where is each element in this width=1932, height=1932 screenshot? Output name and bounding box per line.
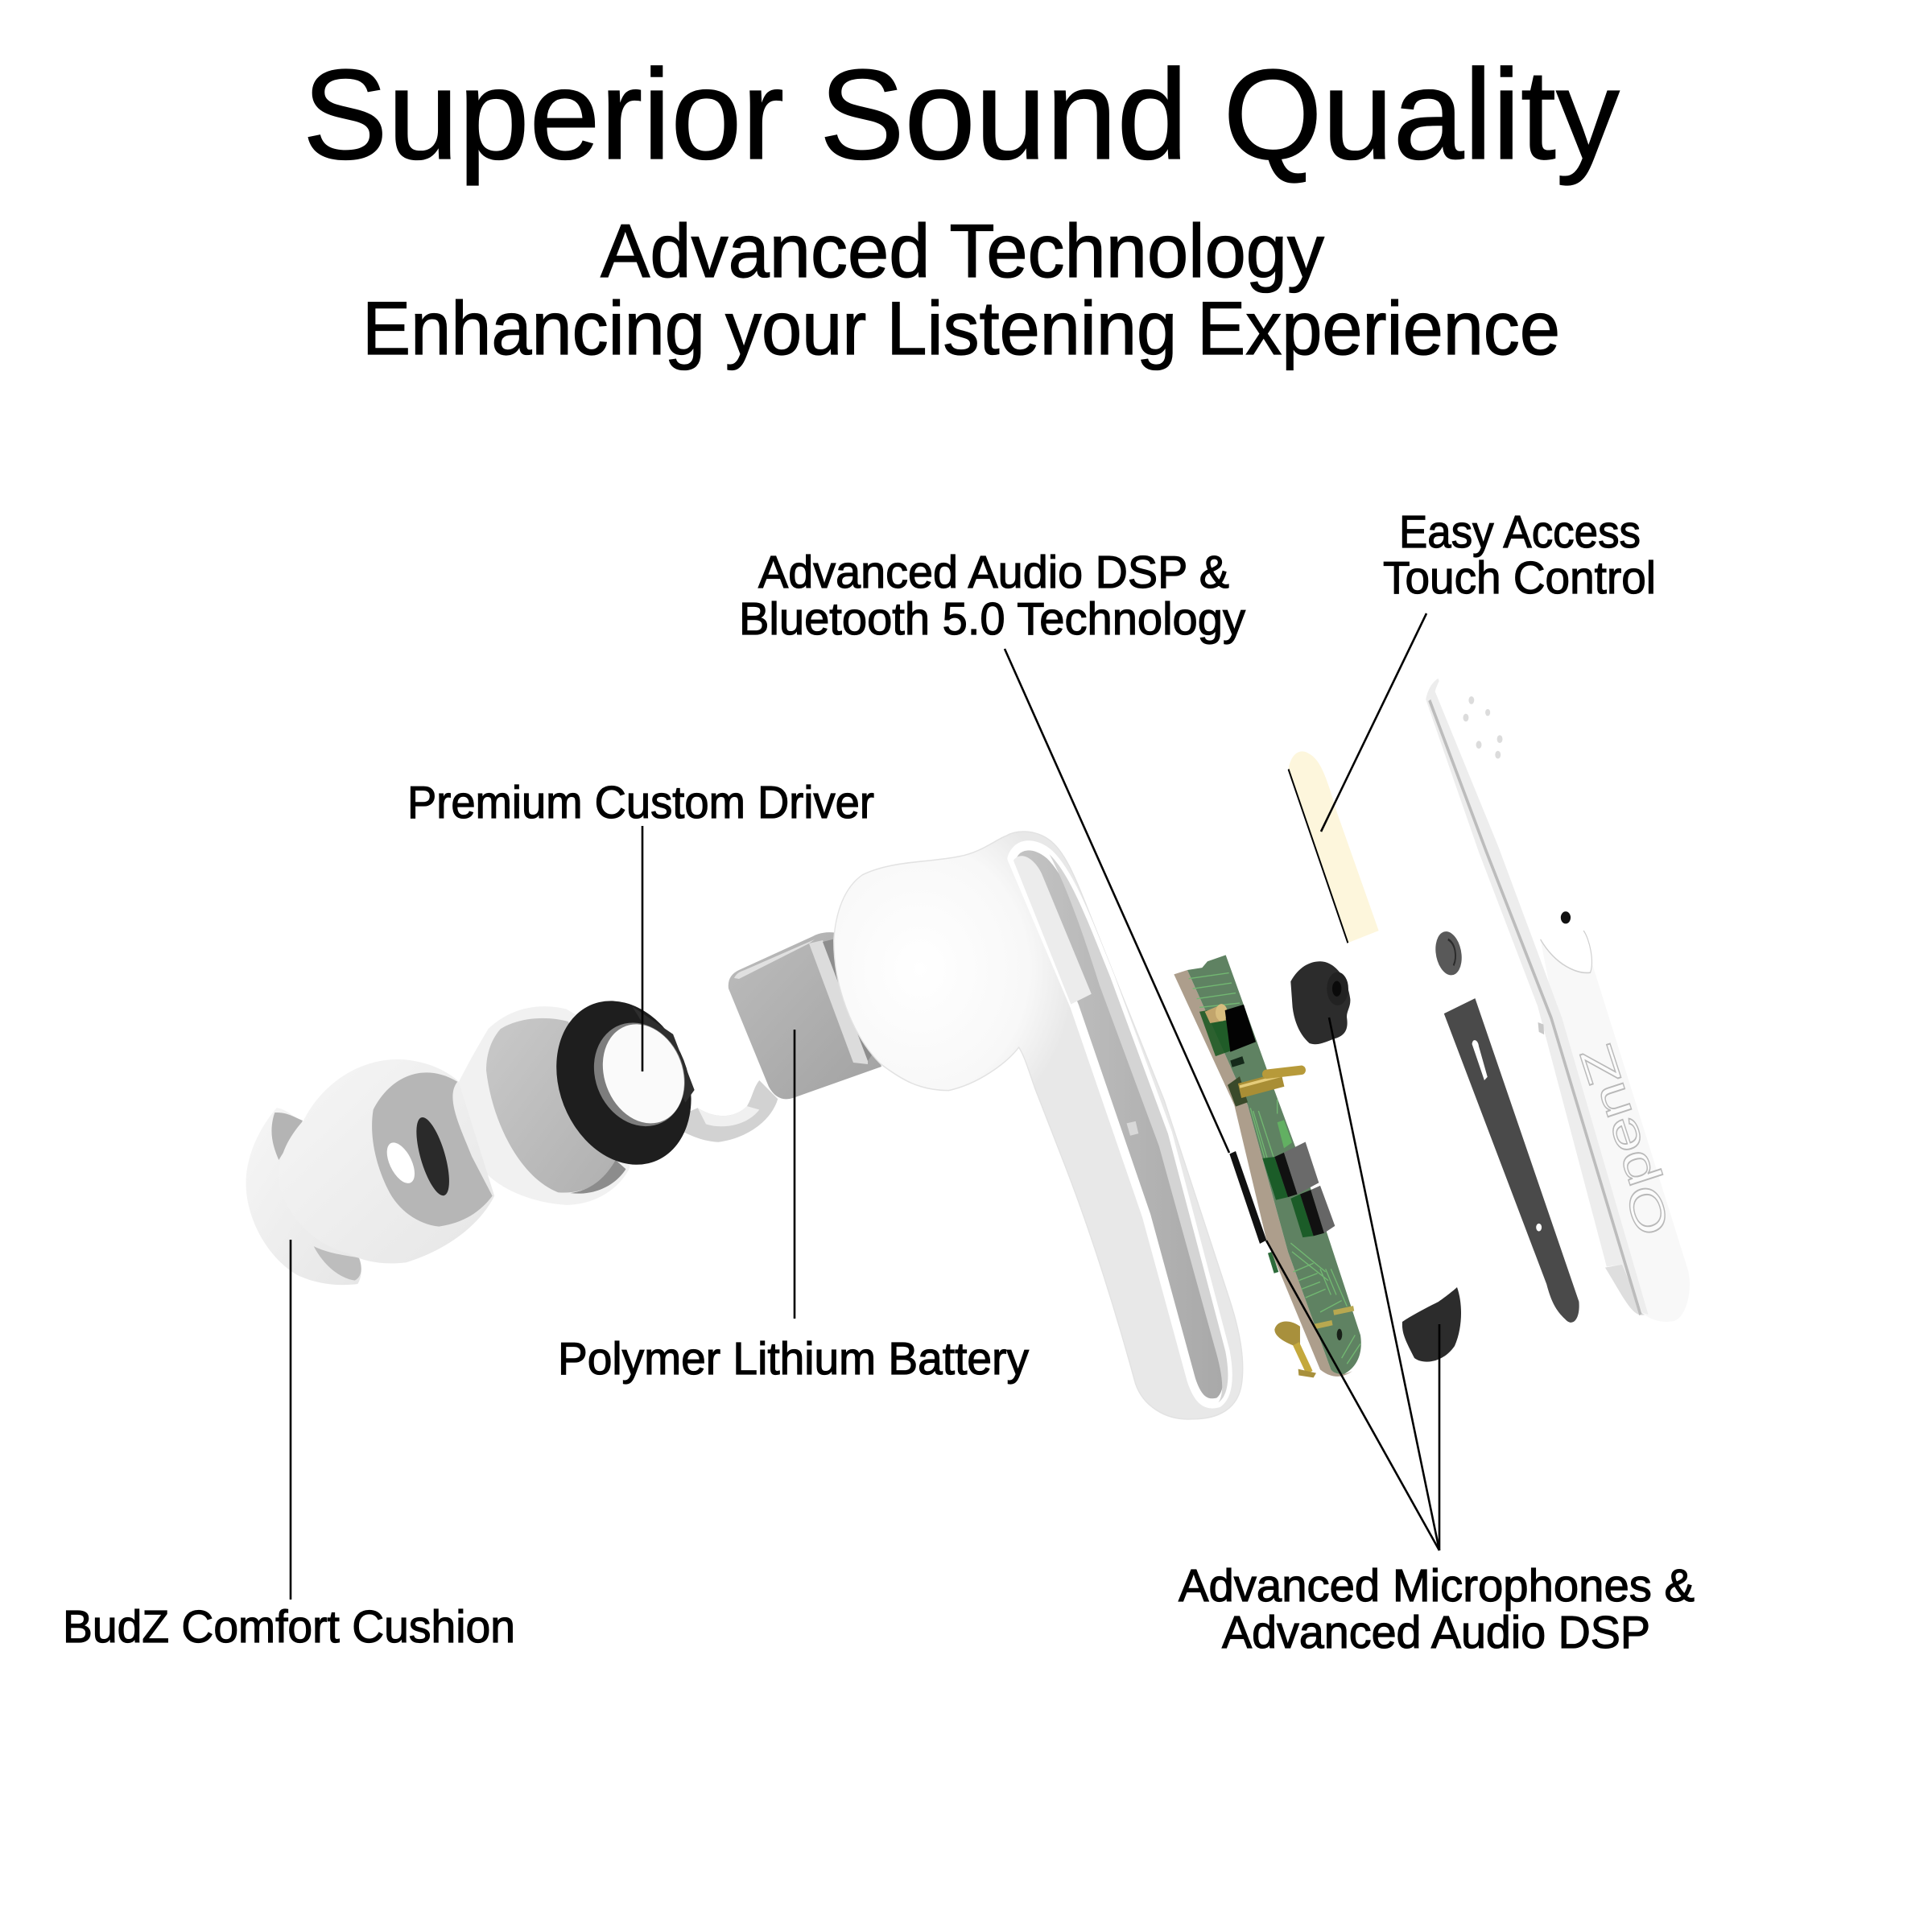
label: DSP and Bluetooth [739, 547, 1245, 645]
black chip [1225, 1005, 1256, 1052]
component: polymer lithium battery [729, 932, 881, 1099]
subtitle line 2: Enhancing your Listening Experience [362, 286, 1560, 370]
label: cushion: BudZ Comfort Cushion [63, 1601, 515, 1653]
label: battery: Polymer Lithium Battery [558, 1333, 1029, 1385]
grey components [1262, 1157, 1288, 1200]
component: touch control strip [1289, 751, 1379, 943]
traces [1189, 973, 1360, 1364]
board face [1187, 955, 1361, 1374]
component: microphone gasket [1290, 961, 1350, 1044]
subtitle line 1: Advanced Technology [601, 208, 1324, 293]
component: lower microphone [1402, 1287, 1461, 1362]
title: Superior Sound Quality [303, 43, 1620, 186]
rear chip [1229, 1151, 1266, 1244]
label: DSP and Bluetooth: Advanced Audio DSP & [758, 547, 1229, 598]
component: outer cover with logo [1426, 674, 1690, 1322]
component: earbud housing [834, 832, 1243, 1419]
label: microphones and DSP: Advanced Audio DSP [1222, 1607, 1650, 1658]
lower pins [1315, 1323, 1332, 1327]
component: flex ribbon [680, 1080, 778, 1142]
lower gold connector [1274, 1321, 1300, 1348]
component: circuit board [1174, 955, 1361, 1377]
component: comfort cushion ear tip [246, 1059, 494, 1285]
embossed logo: OpenZ [1570, 1038, 1680, 1242]
gold cylinder [1199, 1007, 1232, 1056]
component: nozzle cup [448, 1006, 630, 1205]
board edge [1174, 970, 1352, 1377]
component: premium custom driver [536, 988, 711, 1178]
label: microphones and DSP [1179, 1560, 1695, 1658]
label: DSP and Bluetooth: Bluetooth 5.0 Technology [739, 593, 1245, 645]
component: dark plate [1444, 998, 1579, 1323]
label: touch control: Touch Control [1383, 552, 1656, 604]
label: touch control: Easy Access [1399, 506, 1641, 558]
label: touch control [1383, 506, 1656, 604]
spring pins [1228, 1076, 1248, 1107]
label: driver: Premium Custom Driver [407, 777, 874, 828]
component: button gasket [1430, 926, 1467, 981]
leader lines [291, 613, 1439, 1600]
label: microphones and DSP: Advanced Microphones & [1179, 1560, 1695, 1612]
